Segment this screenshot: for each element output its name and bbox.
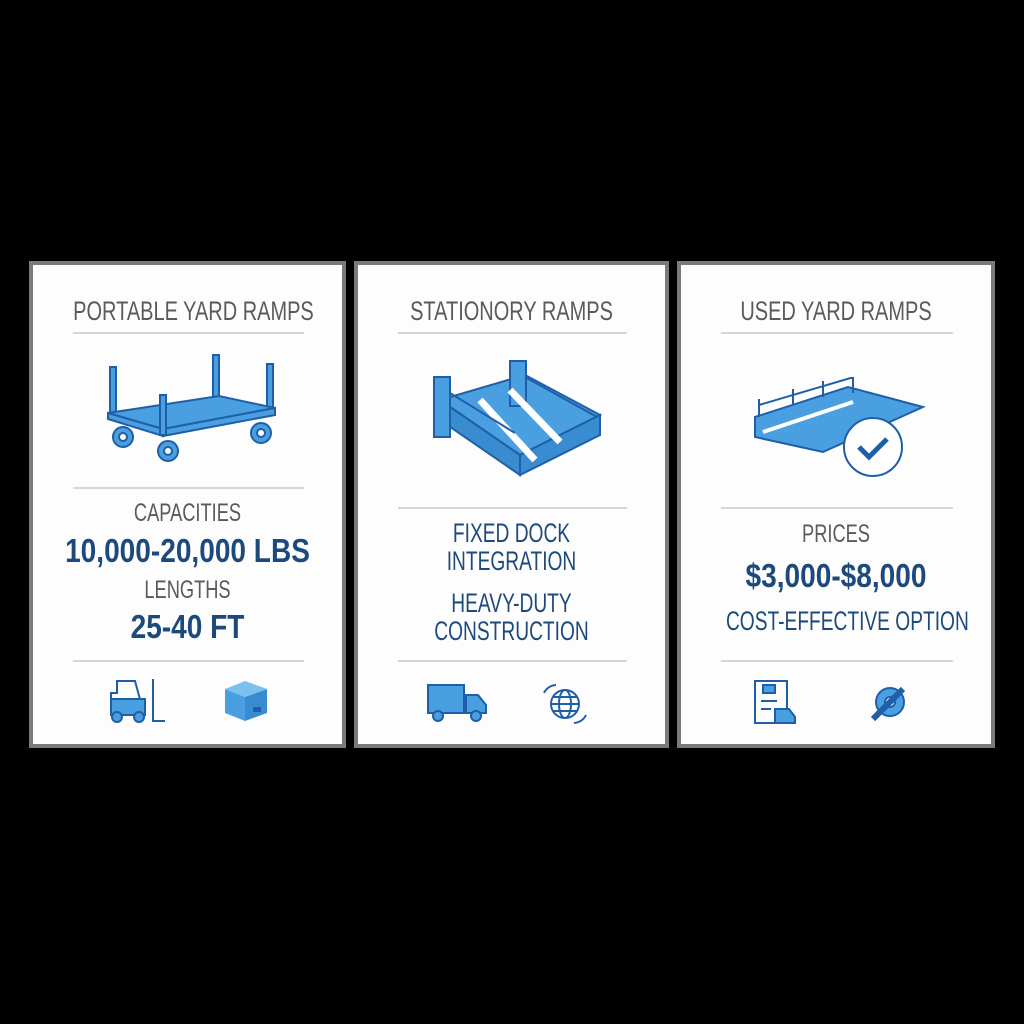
- panel: stationory ramps: CONSTRUCTION: [434, 616, 589, 646]
- panel: stationory ramps: [354, 261, 669, 748]
- icon: ramp with check: [754, 377, 926, 477]
- icon: wrench gear: [870, 686, 906, 722]
- panel: portable yard ramps: 25-40 FT: [131, 608, 244, 645]
- icon: dock ramp: [433, 360, 602, 477]
- panel: stationory ramps: HEAVY-DUTY: [451, 588, 572, 618]
- text: capacities: CAPACITIES: [134, 499, 241, 527]
- icon: truck: [427, 684, 487, 722]
- panel: portable yard ramps: 10,000-20,000 LBS: [65, 532, 310, 569]
- panel: portable yard ramps: [29, 261, 346, 748]
- heading: USED YARD RAMPS: [740, 296, 932, 326]
- icon: box: [225, 681, 267, 721]
- icon: document: [754, 680, 796, 724]
- panel: used yard ramps: [677, 261, 995, 748]
- panel: used yard ramps: $3,000-$8,000: [746, 557, 926, 594]
- text: features: FIXED DOCK: [453, 518, 570, 548]
- heading: PORTABLE YARD RAMPS: [73, 296, 314, 326]
- panel: stationory ramps: INTEGRATION: [447, 546, 576, 576]
- icon: cart: [107, 354, 276, 462]
- text: prices: PRICES: [802, 520, 870, 548]
- icon: globe: [543, 684, 587, 724]
- panel: used yard ramps: COST-EFFECTIVE OPTION: [726, 606, 969, 636]
- panel: portable yard ramps: LENGTHS: [144, 576, 231, 604]
- icon: forklift: [110, 679, 165, 723]
- heading: STATIONORY RAMPS: [410, 296, 613, 326]
